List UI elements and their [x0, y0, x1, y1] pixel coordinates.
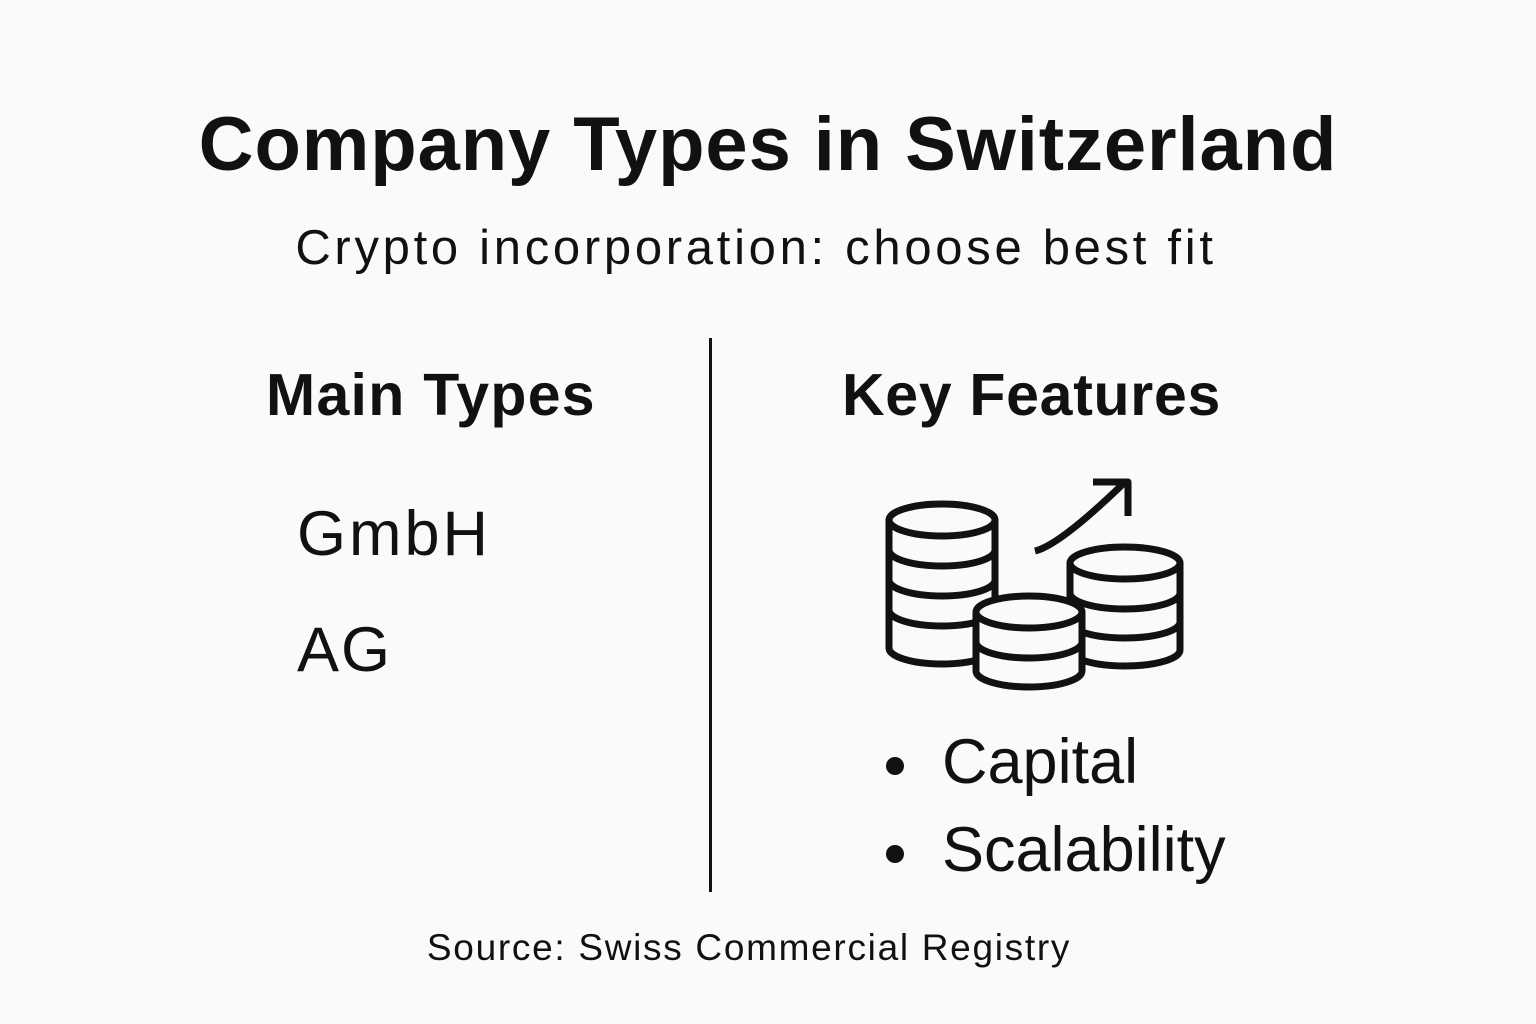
icon: coin stacks with arrow [886, 478, 1184, 690]
heading: key features: Key Features [842, 362, 1221, 428]
heading: main types: Main Types [266, 362, 596, 428]
text: GmbH: GmbH [297, 499, 491, 569]
panel: key features [842, 362, 1226, 885]
divider [709, 338, 712, 892]
text: AG: AG [297, 615, 392, 685]
title: Company Types in Switzerland [199, 102, 1337, 187]
bullet: scalability: Scalability [942, 815, 1226, 885]
bullet: capital: Capital [942, 727, 1138, 797]
subtitle: Crypto incorporation: choose best fit [295, 221, 1217, 275]
bullet list [886, 727, 1226, 885]
source note: Source: Swiss Commercial Registry [427, 927, 1071, 968]
panel: main types [266, 362, 596, 685]
